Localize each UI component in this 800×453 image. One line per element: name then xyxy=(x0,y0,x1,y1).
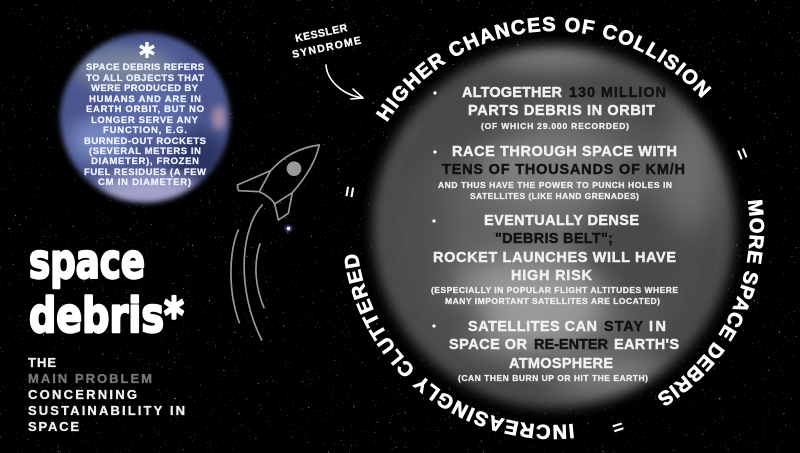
equals sign: top right: = xyxy=(730,145,753,163)
label: Kessler syndrome xyxy=(291,22,362,61)
bullet 3: debris belt: HIGH RISK xyxy=(511,268,593,284)
bullet 3: debris belt: ROCKET LAUNCHES WILL HAVE xyxy=(433,250,676,266)
bullet 4: stay or re-enter: SATELLITES CAN xyxy=(468,319,597,335)
equals sign: left: = xyxy=(339,185,362,199)
definition text: EARTH ORBIT, BUT NO xyxy=(86,104,204,115)
bullet 4: stay or re-enter: EARTH'S xyxy=(614,337,679,353)
bullet 2: speed: SATELLITES (LIKE HAND GRENADES) xyxy=(470,191,639,201)
bullet 1: 130 million parts: ALTOGETHER xyxy=(462,85,563,101)
bullet 1: 130 million parts: 130 MILLION xyxy=(569,85,666,101)
subtitle: CONCERNING xyxy=(28,387,137,402)
ring text: higher chances of collision: HIGHER CHANCES OF COLLISION xyxy=(376,16,712,122)
bullet 2: speed: TENS OF THOUSANDS OF KM/H xyxy=(442,162,685,178)
bright star xyxy=(284,224,292,232)
label: Kessler syndrome: SYNDROME xyxy=(291,35,362,61)
bullet 4: stay or re-enter: (CAN THEN BURN UP OR HIT THE EARTH) xyxy=(458,373,648,383)
bullet 3: debris belt: MANY IMPORTANT SATELLITES ARE LOCATED) xyxy=(445,296,660,306)
subtitle: MAIN PROBLEM xyxy=(28,371,152,386)
bullet 1: 130 million parts: (OF WHICH 29.000 RECORDED) xyxy=(481,121,629,131)
definition text: SPACE DEBRIS REFERS xyxy=(86,62,204,73)
bullet 2: speed: RACE THROUGH SPACE WITH xyxy=(452,144,677,160)
bullet 4: stay or re-enter: STAY xyxy=(604,319,643,335)
planet: definition of space debris xyxy=(60,33,230,210)
bullet 4: stay or re-enter: IN xyxy=(649,319,666,335)
definition text: FUEL RESIDUES (A FEW xyxy=(84,167,206,178)
definition text: BURNED-OUT ROCKETS xyxy=(84,136,206,147)
bullet 4: stay or re-enter: SPACE OR xyxy=(449,337,528,353)
definition text: CM IN DIAMETER) xyxy=(98,177,191,188)
bullet 4: stay or re-enter xyxy=(432,319,679,383)
definition text: DIAMETER), FROZEN xyxy=(91,156,199,167)
definition text: (SEVERAL METERS IN xyxy=(89,146,201,157)
definition text: FUNCTION, E.G. xyxy=(103,125,187,136)
definition text: HUMANS AND ARE IN xyxy=(89,94,201,105)
label: Kessler syndrome: KESSLER xyxy=(294,22,349,45)
bullet 3: debris belt: (ESPECIALLY IN POPULAR FLIGHT ALTITUDES WHERE xyxy=(431,285,678,295)
icon: asterisk xyxy=(140,42,154,58)
ring text: more space debris: MORE SPACE DEBRIS xyxy=(658,200,764,406)
definition text: TO ALL OBJECTS THAT xyxy=(86,73,204,84)
subtitle: SUSTAINABILITY IN xyxy=(28,403,185,418)
bullet 2: speed: AND THUS HAVE THE POWER TO PUNCH HOLES IN xyxy=(438,180,672,190)
bullet 1: 130 million parts xyxy=(433,85,666,131)
icon: rocket with trails xyxy=(231,145,319,340)
definition text xyxy=(84,62,206,188)
bullet 2: speed xyxy=(433,144,685,201)
bullet 3: debris belt xyxy=(431,213,678,306)
ring text: increasingly cluttered: INCREASINGLY CLUTTERED xyxy=(344,254,574,440)
title xyxy=(29,234,184,344)
subtitle: SPACE xyxy=(28,419,79,434)
subtitle xyxy=(28,355,185,434)
bullet 4: stay or re-enter: ATMOSPHERE xyxy=(509,356,613,372)
bullet 4: stay or re-enter: RE-ENTER xyxy=(534,337,609,353)
moon: main circle xyxy=(372,38,734,408)
bullet 3: debris belt: "DEBRIS BELT"; xyxy=(495,231,613,247)
arrow: Kessler to ring xyxy=(326,65,363,99)
moon text block xyxy=(431,85,685,383)
title: debris* xyxy=(29,288,184,344)
equals sign: bottom: = xyxy=(609,415,626,438)
subtitle: THE xyxy=(28,355,56,370)
bullet 1: 130 million parts: PARTS DEBRIS IN ORBIT xyxy=(468,103,655,119)
bullet 3: debris belt: EVENTUALLY DENSE xyxy=(484,213,639,229)
title: space xyxy=(29,234,145,290)
definition text: LONGER SERVE ANY xyxy=(91,115,199,126)
definition text: WERE PRODUCED BY xyxy=(91,83,199,94)
